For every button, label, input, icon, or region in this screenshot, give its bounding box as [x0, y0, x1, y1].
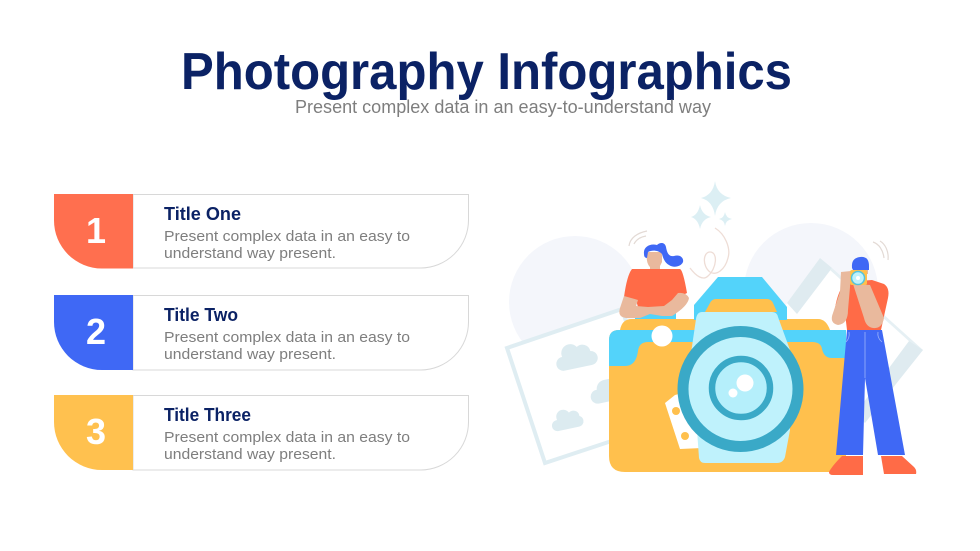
number badge one: 1: [86, 210, 106, 251]
woman hair and ponytail: [644, 243, 683, 267]
lens outer ring: [683, 332, 798, 446]
number badge one: [54, 194, 133, 268]
man shirt: [835, 280, 888, 330]
man trousers: [836, 330, 905, 455]
panel: item two: [54, 295, 468, 370]
number badge two: 2: [86, 311, 106, 352]
woman arms and hands: [619, 293, 689, 318]
camera blue strip right: [780, 330, 846, 358]
man face and hair: [852, 257, 869, 274]
camera blue strip left: [609, 330, 700, 366]
tag with dots: [665, 388, 702, 449]
lens barrel: [690, 312, 790, 463]
sound arcs near man: [873, 241, 888, 260]
tilted photo with clouds: [507, 309, 660, 463]
sound arcs near woman: [629, 231, 647, 246]
camera body: [609, 330, 846, 472]
viewfinder housing: [694, 277, 787, 320]
swirl line: [690, 228, 729, 278]
woman head and neck: [647, 252, 662, 272]
item three text: [164, 429, 410, 463]
panel: item three: [54, 395, 468, 470]
woman photographer: [619, 243, 689, 321]
woman top on camera: [635, 313, 676, 321]
shutter button: [652, 326, 672, 346]
item two heading: Title Two: [164, 305, 238, 325]
man photographer: [829, 257, 916, 475]
lens inner ring: [712, 359, 770, 417]
man right arm: [853, 284, 884, 328]
lens highlights: [728, 374, 754, 398]
background circles: [509, 223, 878, 368]
item three heading: Title Three: [164, 405, 251, 425]
number badge two: [54, 295, 133, 370]
large camera: [609, 277, 846, 472]
panel: item one: [54, 194, 468, 268]
item one text: understand way present.: [164, 245, 336, 262]
number badge three: 3: [86, 411, 106, 452]
item three text: understand way present.: [164, 446, 336, 463]
camera top plate: [620, 319, 830, 330]
item two text: [164, 329, 410, 363]
title: Photography Infographics: [181, 43, 792, 101]
number badge three: [54, 395, 133, 470]
item one text: [164, 228, 410, 262]
woman shirt: [624, 269, 687, 307]
small camera: [850, 270, 867, 285]
item one text: Present complex data in an easy to: [164, 228, 410, 245]
orange band: [705, 299, 777, 312]
mountain photo frame: [760, 258, 923, 423]
illustration: photographers and camera: [507, 181, 923, 475]
subtitle: Present complex data in an easy-to-understand way: [295, 97, 711, 117]
man left arm: [832, 271, 851, 325]
item two text: Present complex data in an easy to: [164, 329, 410, 346]
item two text: understand way present.: [164, 346, 336, 363]
man shoes: [829, 456, 916, 475]
item three text: Present complex data in an easy to: [164, 429, 410, 446]
item one heading: Title One: [164, 204, 241, 224]
sparkles: [691, 181, 732, 229]
